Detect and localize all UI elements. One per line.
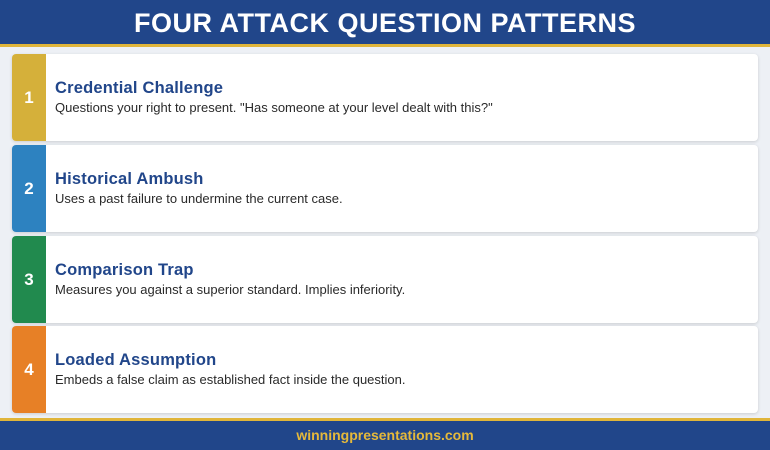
- panel: loaded assumption: Loaded Assumption: [55, 351, 216, 369]
- panel: credential challenge: 1: [24, 88, 34, 107]
- panel: comparison trap: [12, 236, 758, 323]
- panel: historical ambush: Historical Ambush: [55, 170, 204, 188]
- title: FOUR ATTACK QUESTION PATTERNS: [134, 8, 636, 38]
- footer: [0, 418, 770, 450]
- footer: winningpresentations.com: [296, 427, 474, 443]
- panel: historical ambush: [12, 145, 758, 232]
- panel: historical ambush: Uses a past failure to undermine the current case.: [55, 191, 343, 206]
- panel: comparison trap: Comparison Trap: [55, 261, 194, 279]
- title: [0, 0, 770, 47]
- panel: historical ambush: 2: [24, 179, 34, 198]
- panel: credential challenge: Credential Challenge: [55, 79, 223, 97]
- panel: comparison trap: 3: [24, 270, 34, 289]
- panel: loaded assumption: [12, 326, 758, 413]
- panel: credential challenge: Questions your right to present. "Has someone at your level dealt with this?": [55, 100, 493, 115]
- panel: loaded assumption: Embeds a false claim as established fact inside the question.: [55, 372, 405, 387]
- panel: credential challenge: [12, 54, 758, 141]
- panel: comparison trap: Measures you against a superior standard. Implies inferiority.: [55, 282, 405, 297]
- panel: loaded assumption: 4: [24, 360, 34, 379]
